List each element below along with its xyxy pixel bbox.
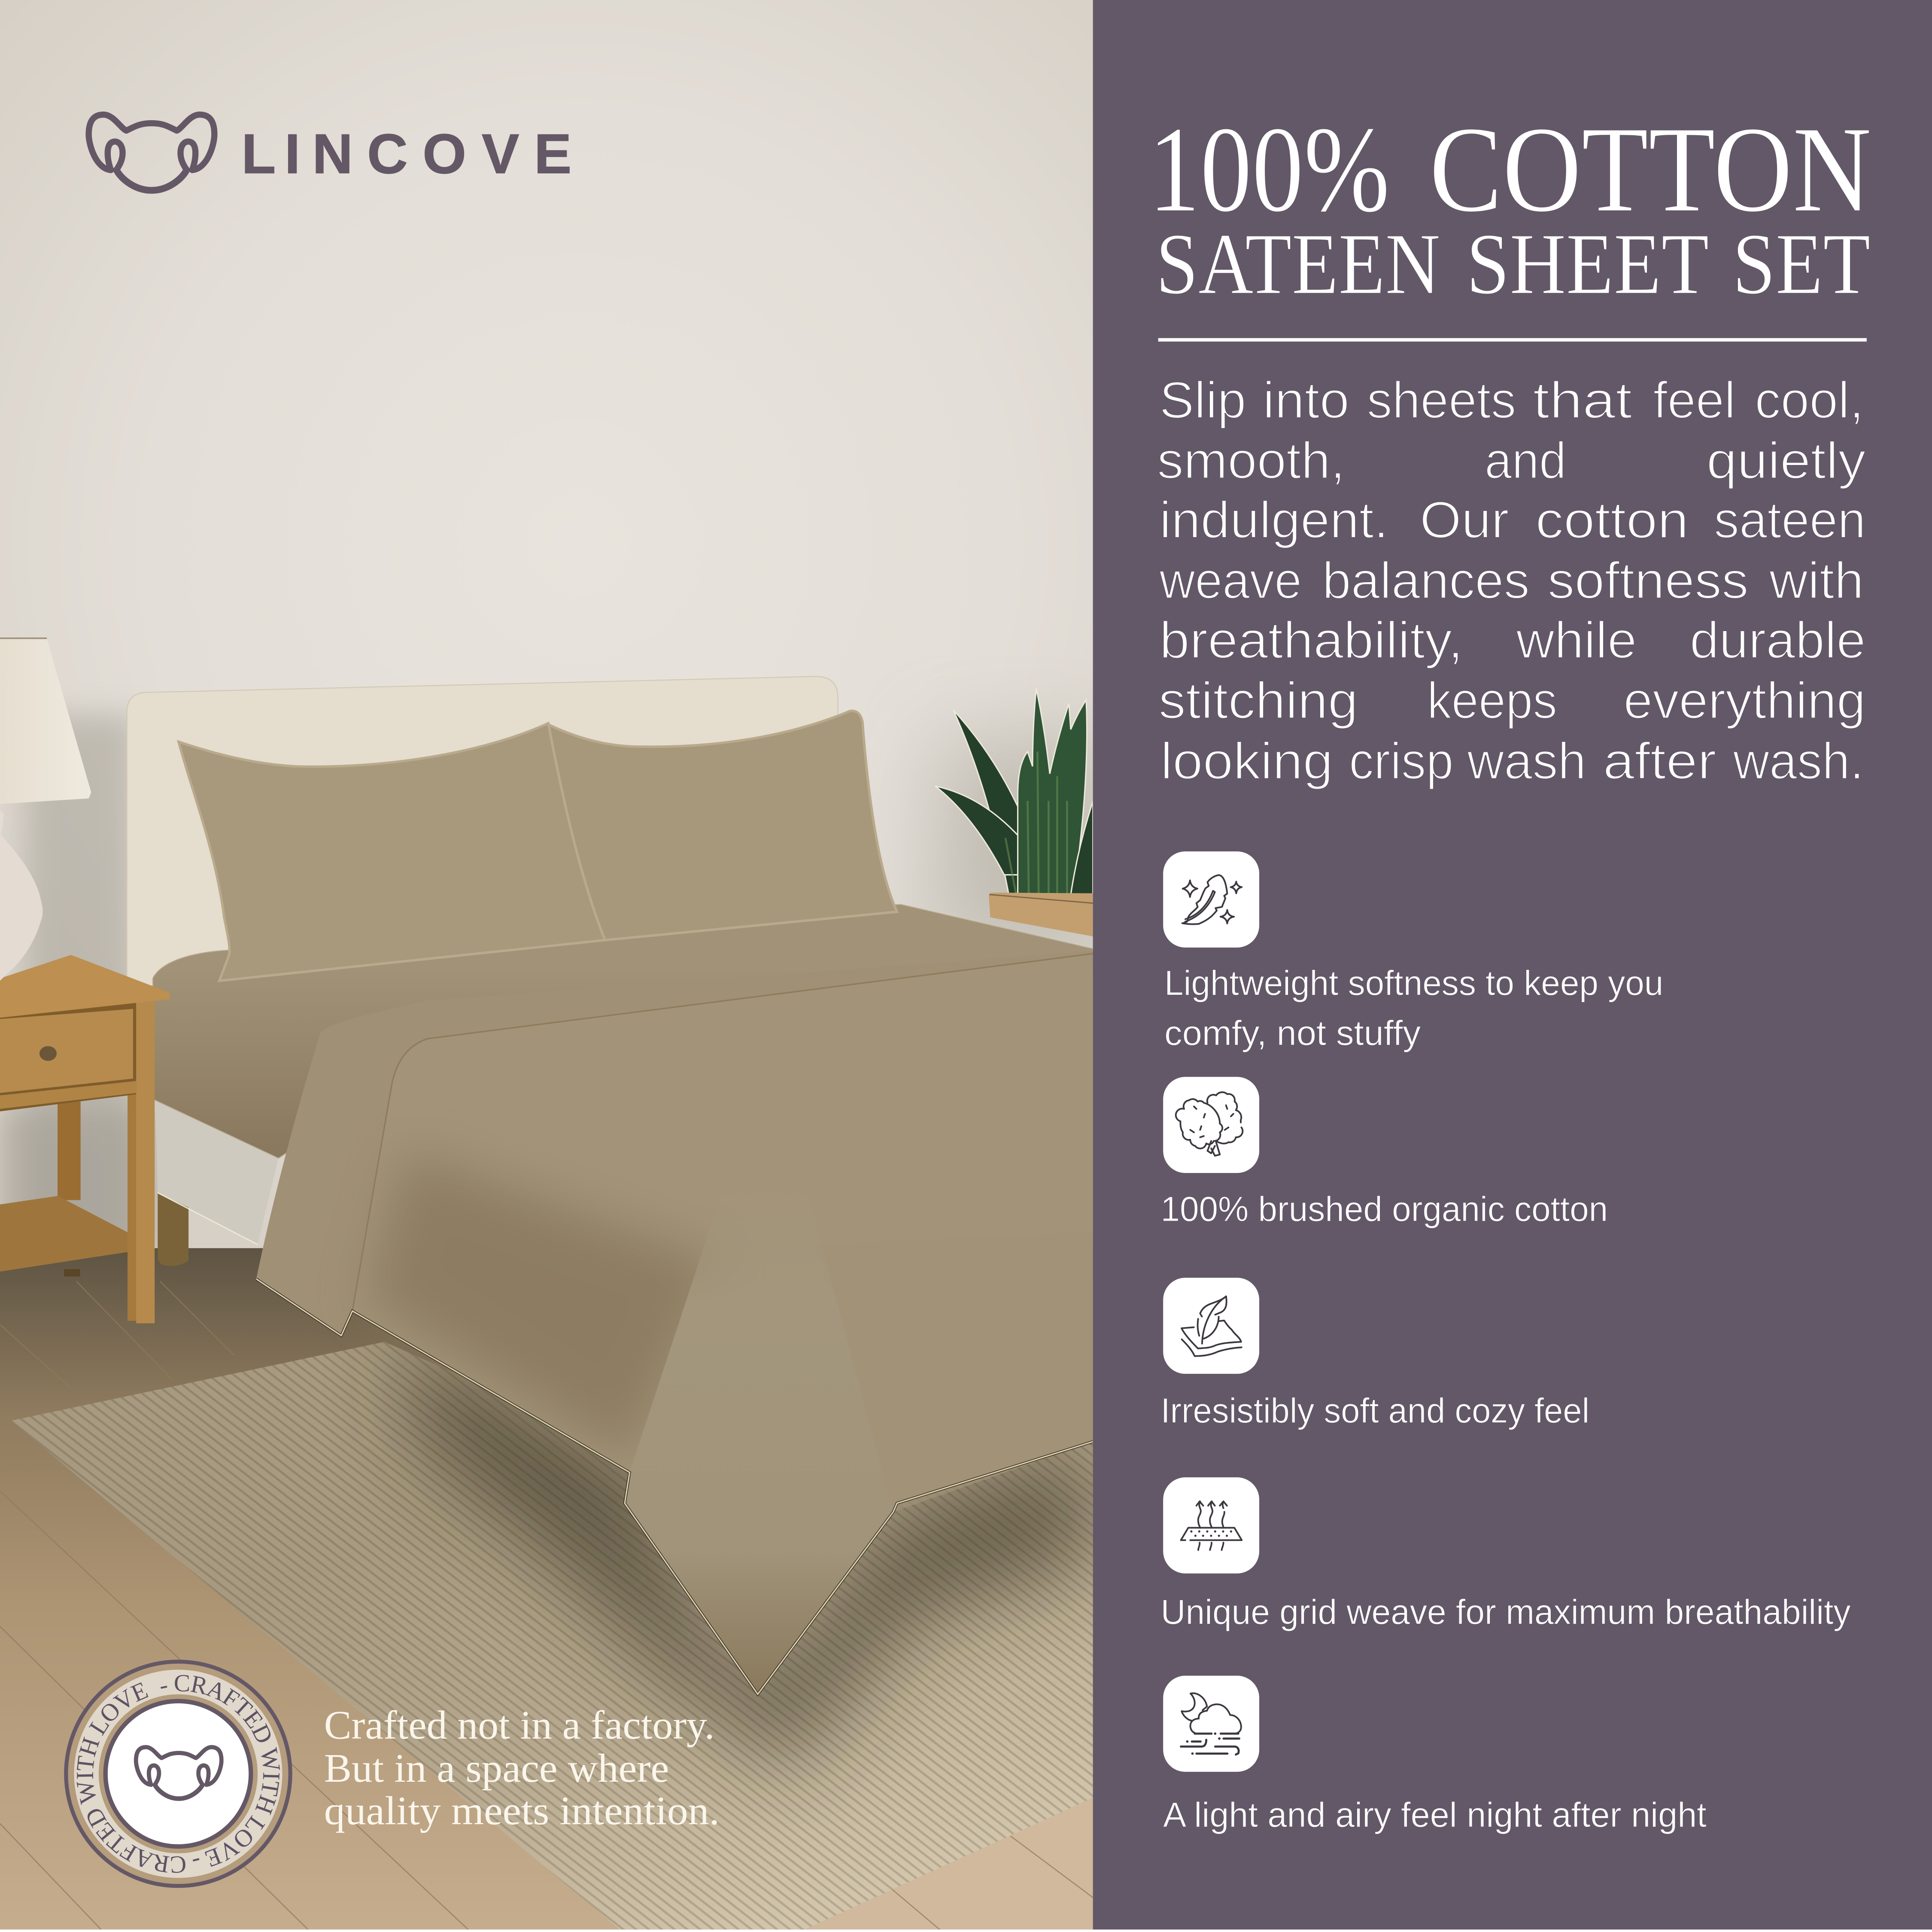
body paragraph: Slip [1160,371,1246,429]
title: SET [1732,216,1871,313]
body paragraph: weave [1159,552,1302,609]
body paragraph: wash. [1733,732,1864,790]
plant pot [989,893,1093,936]
body paragraph: into [1263,371,1349,429]
top sheet body [256,954,1093,1694]
body paragraph: wash [1467,732,1586,790]
body paragraph: that [1533,371,1632,429]
title: SATEEN [1156,216,1440,313]
pillow right [548,711,897,940]
caption: crafted not in a factory: But in a space where [324,1746,669,1791]
feature: lightweight softness: comfy, not stuffy [1164,1014,1421,1053]
body paragraph: cool, [1755,371,1864,429]
badge: crafted with love [66,1662,290,1886]
body paragraph: looking [1160,732,1333,790]
body paragraph: sateen [1714,491,1866,549]
fitted sheet [153,905,1093,1158]
body paragraph: while [1516,611,1637,669]
divider rule [1158,338,1867,342]
rug [11,1337,1093,1929]
icon: breathable grid weave [1163,1477,1259,1574]
hanging corner [625,1177,893,1694]
bed base and leg [155,1099,279,1266]
body paragraph: quietly [1707,431,1866,489]
feature: grid weave breathability [1160,1477,1851,1632]
right face [814,1232,1093,1512]
icon: moon, cloud and wind [1163,1676,1259,1772]
title: SHEET [1466,216,1709,313]
feature: light and airy [1163,1676,1707,1835]
body paragraph: Our [1420,491,1509,549]
floor [0,1248,1093,1932]
pillow left [179,723,605,981]
badge logo mark [136,1747,222,1798]
caption: crafted not in a factory: quality meets intention. [324,1789,720,1833]
title [1148,101,1871,313]
body paragraph: softness [1548,552,1749,609]
feature: lightweight softness [1163,851,1663,1053]
caption: crafted not in a factory [324,1703,720,1833]
icon: feather with sparkles [1163,851,1259,948]
side shading [365,1152,721,1460]
plant [935,688,1093,936]
folded top sheet band [256,951,1093,1336]
body paragraph: with [1769,552,1864,609]
body paragraph: after [1603,732,1716,790]
lamp [0,638,91,981]
photo: bedroom scene [0,0,1109,1932]
nightstand [0,955,170,1323]
logo: Lincove [89,115,571,190]
text: A light and airy feel night after night [1163,1795,1707,1835]
icon: cotton bolls [1163,1077,1259,1173]
body paragraph: stitching [1159,671,1358,729]
body paragraph: balances [1322,552,1530,609]
caption: crafted not in a factory: Crafted not in a factory. [324,1703,715,1747]
title: 100% [1148,101,1390,238]
text: Lightweight softness to keep you [1164,963,1663,1002]
body paragraph: smooth, [1157,431,1345,489]
text: 100% brushed organic cotton [1160,1190,1608,1229]
panel: product details [1093,0,1932,1932]
bottom edge strip [0,1929,1932,1932]
body paragraph: breathability, [1160,611,1463,669]
title: COTTON [1429,101,1871,238]
body paragraph: durable [1690,611,1866,669]
body paragraph: indulgent. [1160,491,1388,549]
body paragraph: cotton [1535,491,1689,549]
body paragraph: keeps [1427,671,1557,729]
feature: soft and cozy [1160,1278,1589,1430]
badge ring text: - CRAFTED WITH LOVE - CRAFTED WITH LOVE [71,1670,286,1878]
body paragraph: and [1485,431,1566,489]
body paragraph: feel [1653,371,1735,429]
sheet hem [256,1279,1093,1694]
wall [0,0,1109,1282]
icon: feather over fabric [1163,1278,1259,1374]
text: Unique grid weave for maximum breathability [1160,1593,1851,1632]
wordmark: LINCOVE [242,122,571,185]
body paragraph [1157,371,1866,790]
body paragraph: everything [1623,671,1866,729]
body paragraph: crisp [1349,732,1454,790]
body paragraph: sheets [1367,371,1516,429]
text: Irresistibly soft and cozy feel [1160,1391,1589,1430]
feature: organic cotton [1160,1077,1608,1229]
headboard [127,677,838,986]
